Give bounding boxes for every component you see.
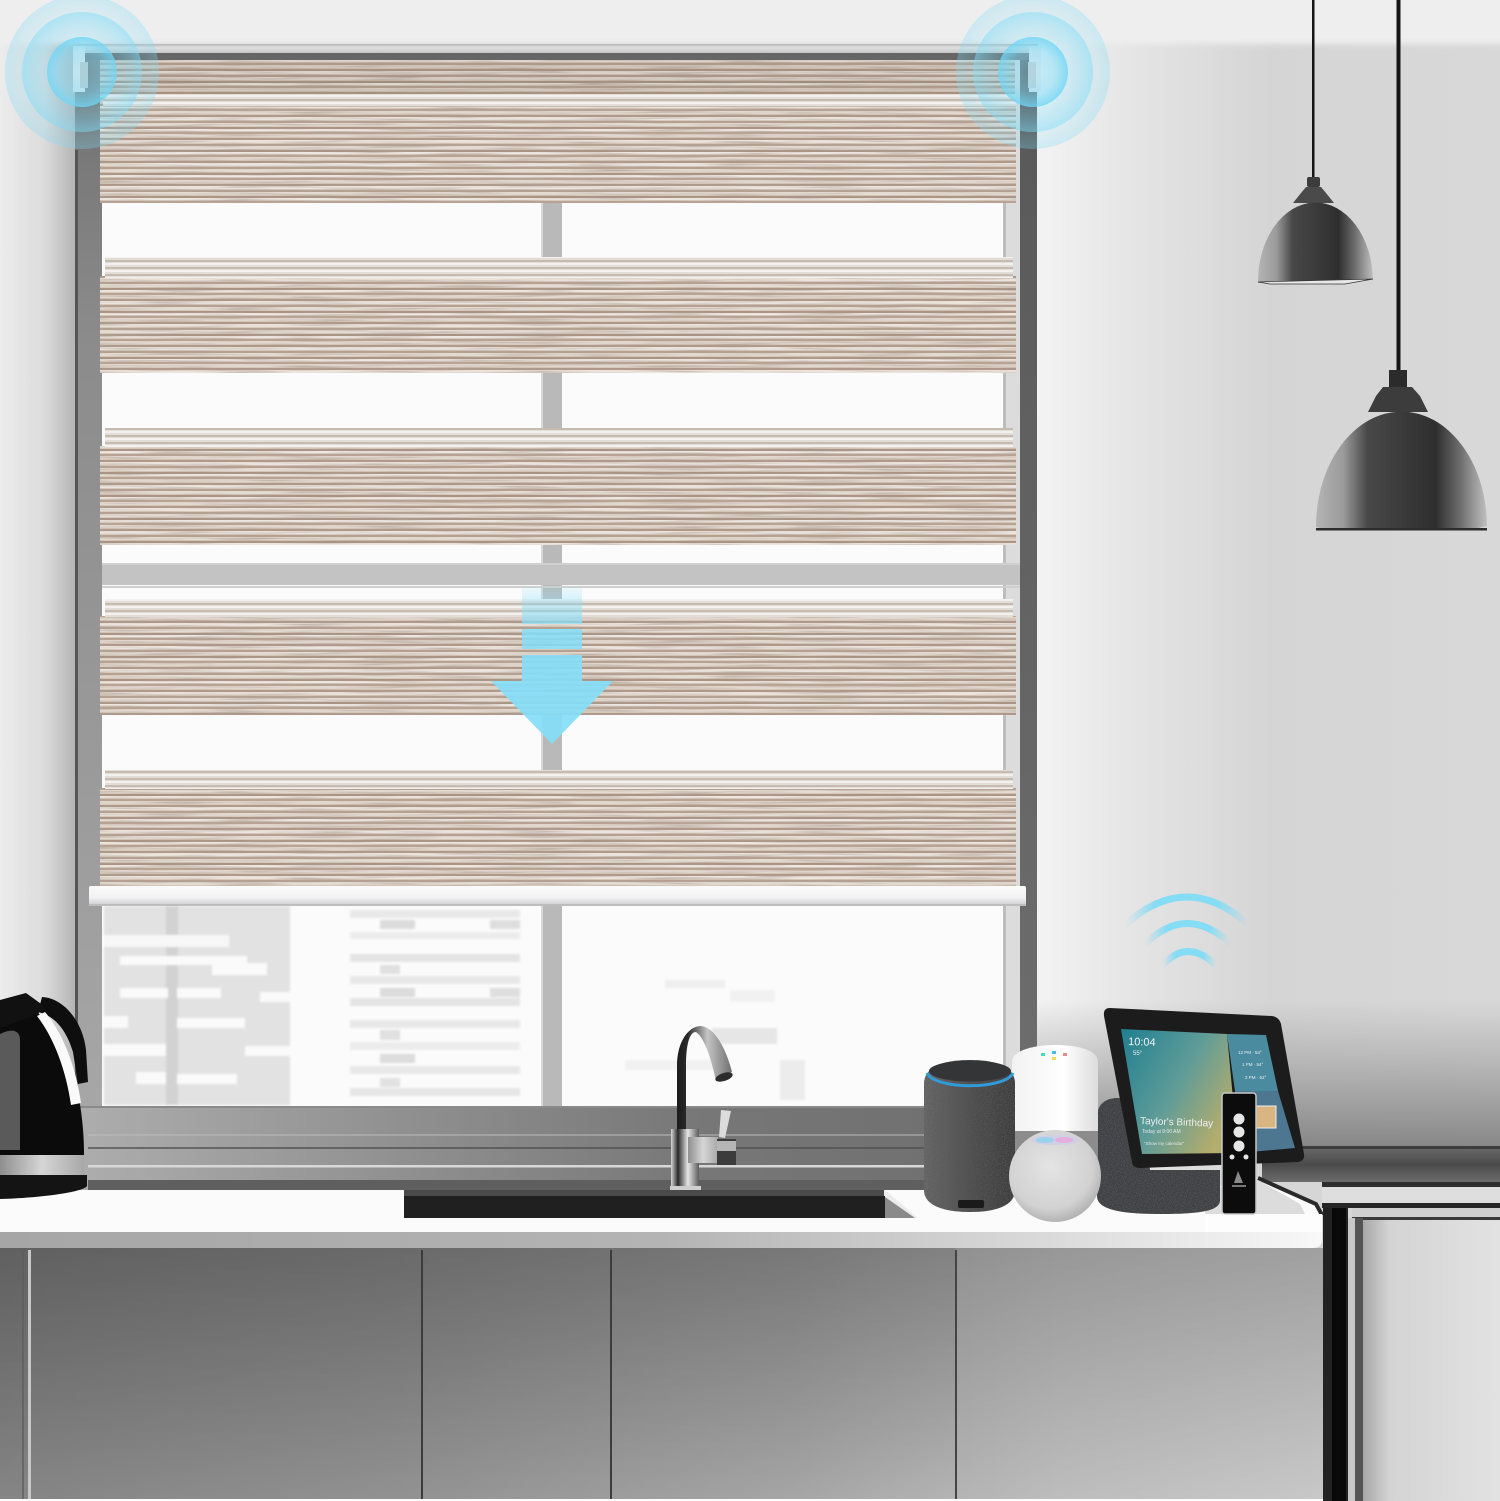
pendant lamp large — [1316, 0, 1487, 530]
faucet neck and spout — [677, 1026, 732, 1132]
device: google home — [1012, 1045, 1098, 1162]
screen: 1 PM · 54° — [1242, 1062, 1264, 1067]
icon: sensor waves left — [5, 0, 159, 149]
device: echo speaker — [924, 1060, 1015, 1212]
roller blind: head rail, roller and brackets — [73, 44, 1041, 96]
device: homepod mini — [1009, 1130, 1101, 1222]
zebra fabric bands — [100, 94, 1016, 887]
fridge — [1262, 1146, 1500, 1501]
kettle — [0, 993, 88, 1199]
sink — [404, 1190, 918, 1218]
screen: 10:04 — [1128, 1036, 1156, 1049]
screen: Taylor's Birthday — [1140, 1116, 1213, 1130]
icon: wifi signal — [1126, 897, 1248, 965]
window sill — [78, 1106, 1038, 1191]
device: remote control — [1222, 1093, 1256, 1214]
screen: 55° — [1133, 1051, 1143, 1057]
countertop — [0, 1178, 1322, 1248]
window glass and mullions — [102, 203, 1020, 1106]
device: echo show stand — [1097, 1098, 1220, 1214]
screen: Today at 8:00 AM — [1142, 1129, 1181, 1135]
arrow: blind moving down — [491, 587, 613, 744]
sheer band tops — [103, 94, 1016, 789]
icon: sensor waves right — [956, 0, 1110, 149]
city view through the window — [104, 906, 805, 1105]
blind bottom rail — [89, 886, 1026, 906]
faucet — [670, 1026, 736, 1190]
screen — [1121, 1029, 1295, 1154]
screen: 2 PM · 52° — [1245, 1075, 1267, 1080]
cabinets — [0, 1248, 1323, 1501]
device: echo show display — [1104, 1008, 1304, 1168]
screen: "Show my calendar" — [1144, 1141, 1185, 1146]
fabric bands texture — [100, 96, 1016, 887]
pendant lamp small — [1258, 0, 1373, 284]
spout nozzle — [714, 1070, 734, 1084]
window frame — [75, 50, 1037, 1185]
screen: 12 PM · 54° — [1238, 1050, 1262, 1055]
